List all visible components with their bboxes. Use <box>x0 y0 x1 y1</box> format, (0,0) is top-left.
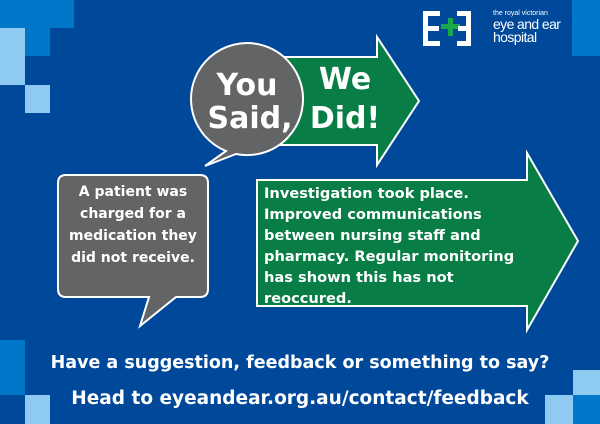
speech box: complaint: medication they <box>69 228 197 244</box>
logo: eye and ear <box>493 16 560 32</box>
arrow: We Did: Did! <box>310 101 380 136</box>
speech box: complaint <box>58 175 208 326</box>
arrow: response: has shown this has not <box>264 269 454 286</box>
arrow: response: Improved communications <box>264 206 482 223</box>
arrow: We Did: We <box>319 62 371 97</box>
speech box: complaint: did not receive. <box>71 250 195 266</box>
speech bubble: You Said <box>191 43 303 166</box>
arrow: response: reoccured. <box>264 290 352 307</box>
logo <box>423 10 561 46</box>
speech box: complaint: A patient was <box>79 184 187 200</box>
speech bubble: You Said: Said, <box>207 101 293 136</box>
arrow: response: between nursing staff and <box>264 227 481 244</box>
arrow: We Did <box>270 37 419 165</box>
arrow: response <box>257 153 578 330</box>
speech bubble: You Said: You <box>216 68 277 103</box>
speech box: complaint: charged for a <box>80 206 186 222</box>
logo: the royal victorian <box>493 10 548 17</box>
footer link: Head to eyeandear.org.au/contact/feedback <box>71 388 529 409</box>
arrow: response: Investigation took place. <box>264 185 469 202</box>
footer text: Have a suggestion, feedback or something to say? <box>51 353 549 373</box>
arrow: response: pharmacy. Regular monitoring <box>264 248 514 265</box>
logo: hospital <box>493 29 536 45</box>
